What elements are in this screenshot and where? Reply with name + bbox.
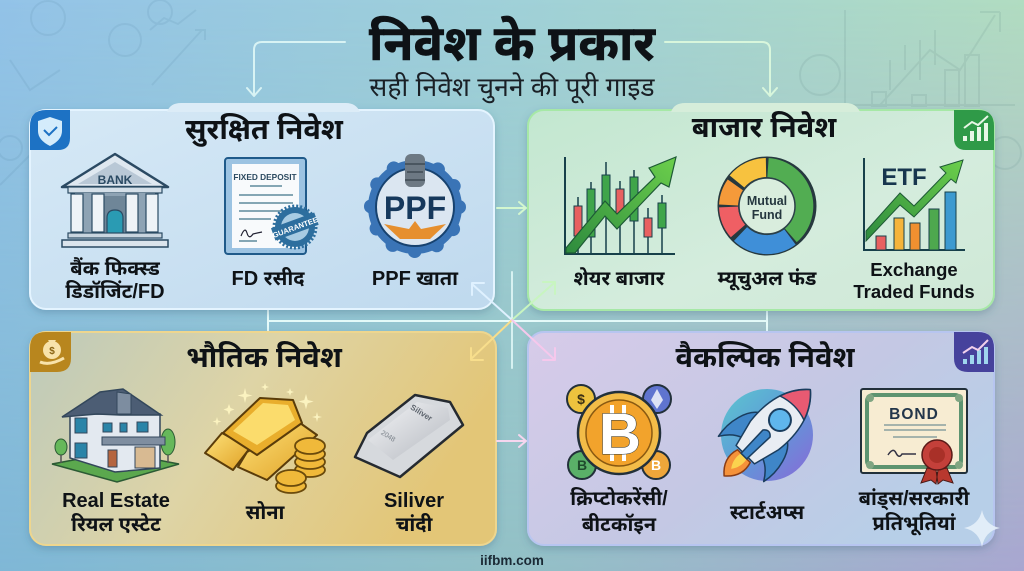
icon: bond certificate bbox=[861, 389, 967, 484]
icon: chart badge bbox=[954, 332, 994, 372]
label: सोना bbox=[246, 500, 286, 524]
label: म्यूचुअल फंड bbox=[718, 266, 817, 291]
label: PPF खाता bbox=[372, 268, 459, 290]
panel: safe investment bbox=[30, 103, 494, 309]
icon: money bag badge: $ bbox=[49, 346, 55, 357]
icon: crypto coins: B bbox=[577, 457, 587, 473]
icon: bond certificate: BOND bbox=[889, 406, 939, 423]
website credit: iifbm.com bbox=[480, 553, 544, 568]
icon: PPF seal: PPF bbox=[384, 190, 446, 226]
icon: fixed deposit receipt: GUARANTEE bbox=[271, 215, 319, 240]
label: स्टार्टअप्स bbox=[730, 501, 805, 524]
label: Siliver bbox=[384, 490, 444, 512]
icon: silver bar: Siliver bbox=[409, 403, 434, 423]
label: बीटकॉइन bbox=[582, 512, 657, 536]
label: क्रिप्टोकरेंसी/ bbox=[570, 486, 668, 510]
heading: बाजार निवेश bbox=[692, 110, 837, 144]
icon: fixed deposit receipt bbox=[225, 158, 319, 254]
label: बांड्स/सरकारी bbox=[859, 486, 970, 511]
panel: physical investment bbox=[30, 332, 496, 545]
icon: house bbox=[52, 389, 179, 482]
heading: भौतिक निवेश bbox=[186, 340, 343, 374]
label: प्रतिभूतियां bbox=[872, 511, 957, 536]
icon: ETF chart bbox=[864, 158, 965, 250]
label: बैंक फिक्स्ड bbox=[70, 256, 160, 280]
decorative sparkle bbox=[964, 510, 1000, 547]
panel: market investment bbox=[528, 103, 994, 310]
icon: bank bbox=[62, 154, 168, 247]
label: FD रसीद bbox=[232, 266, 305, 290]
label: डिडॉजिंट/FD bbox=[65, 279, 165, 303]
subtitle: सही निवेश चुनने की पूरी गाइड bbox=[369, 71, 655, 104]
label: Exchange bbox=[870, 259, 958, 280]
icon: crypto coins: B bbox=[651, 457, 661, 473]
label: रियल एस्टेट bbox=[71, 512, 162, 536]
icon: money bag badge bbox=[30, 332, 71, 372]
icon: fixed deposit receipt: FIXED DEPOSIT bbox=[233, 172, 297, 182]
icon: PPF seal bbox=[368, 154, 462, 254]
label: Real Estate bbox=[62, 490, 170, 512]
icon: bank: BANK bbox=[98, 173, 133, 187]
label: शेयर बाजार bbox=[574, 266, 666, 290]
icon: stock chart bbox=[565, 157, 676, 254]
panel: alternative investment bbox=[528, 332, 994, 545]
icon: ETF chart: ETF bbox=[881, 164, 927, 191]
label: Traded Funds bbox=[853, 281, 975, 302]
icon: crypto coins: $ bbox=[577, 391, 585, 407]
title: निवेश के प्रकार bbox=[369, 15, 656, 71]
icon: mutual fund donut: Mutual bbox=[747, 194, 787, 208]
icon: rocket bbox=[701, 366, 834, 499]
icon: shield badge bbox=[30, 110, 70, 150]
heading: सुरक्षित निवेश bbox=[185, 112, 344, 147]
arrows: center to panels bbox=[471, 202, 555, 447]
label: चांदी bbox=[396, 512, 434, 536]
heading: वैकल्पिक निवेश bbox=[675, 340, 856, 374]
icon: crypto coins bbox=[567, 385, 671, 479]
icon: mutual fund donut bbox=[728, 168, 806, 245]
icon: growth badge bbox=[954, 110, 994, 150]
icon: mutual fund donut: Fund bbox=[752, 208, 782, 222]
connector lines bbox=[247, 42, 777, 368]
icon: gold bars and coins bbox=[205, 383, 325, 493]
icon: crypto coins: B bbox=[599, 402, 641, 467]
icon: silver bar: 2048 bbox=[379, 430, 396, 444]
icon: silver bar bbox=[355, 395, 463, 477]
